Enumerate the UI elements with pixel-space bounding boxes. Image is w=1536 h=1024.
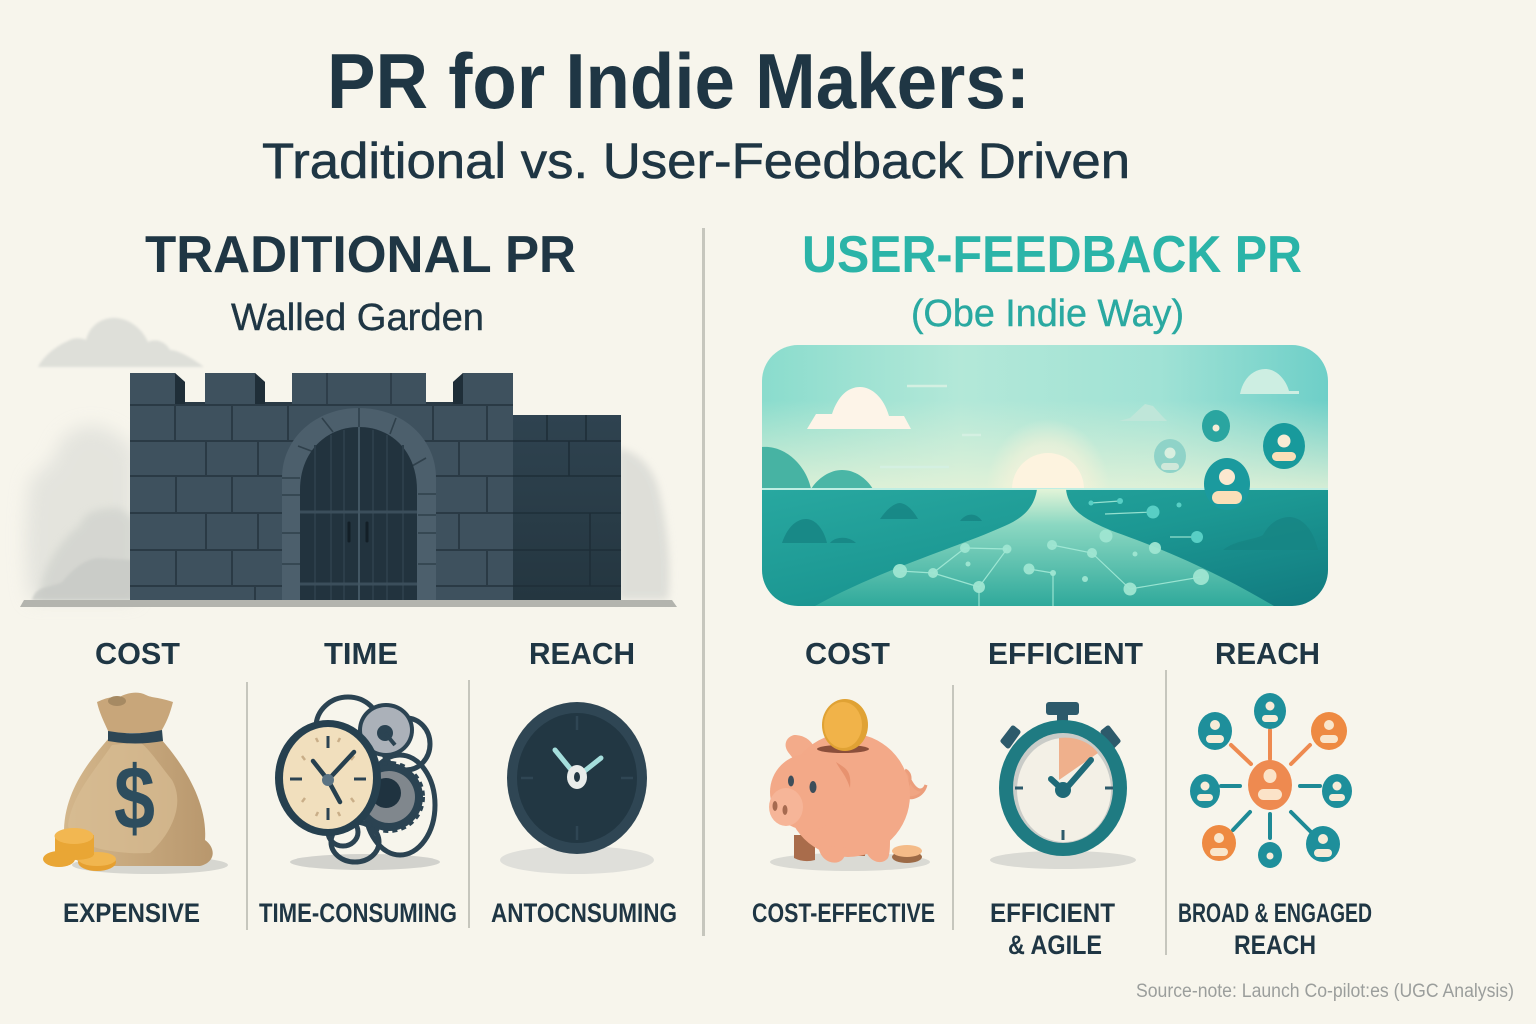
label: cost: COST (805, 636, 890, 671)
central user (1248, 760, 1292, 810)
value: efficient and agile: EFFICIENT (990, 898, 1115, 928)
value: broad and engaged reach (1178, 898, 1372, 960)
ground line (20, 600, 677, 607)
label: reach: REACH (1215, 636, 1320, 671)
glowing road (815, 489, 1274, 606)
metric: time (259, 636, 457, 928)
title: PR for Indie Makers: (327, 37, 1030, 125)
illustration: castle wall with gate (20, 318, 677, 607)
label: cost: COST (95, 636, 180, 671)
subheading: walled garden: Walled Garden (231, 297, 484, 339)
label: time: TIME (324, 636, 398, 671)
gold coins (43, 828, 116, 871)
main wall with bricks (130, 403, 513, 600)
sky (762, 345, 1328, 490)
subheading: obe indie way: (Obe Indie Way) (911, 293, 1184, 335)
grey gear (358, 703, 414, 757)
metric: cost (752, 636, 935, 928)
value: cost-effective: COST-EFFECTIVE (752, 898, 935, 928)
stone archway (282, 408, 436, 600)
sun with glow (998, 425, 1099, 488)
value: expensive: EXPENSIVE (63, 898, 200, 928)
wooden door (300, 427, 417, 600)
distant mounds (782, 503, 1318, 550)
sea (762, 489, 1328, 606)
connectors (1221, 730, 1320, 838)
small coin (892, 845, 922, 863)
clouds behind the wall (26, 318, 670, 600)
label: reach: REACH (529, 636, 635, 671)
metric: cost (43, 636, 228, 928)
metric: reach (1178, 636, 1372, 960)
metric: reach (491, 636, 677, 928)
metric divider (468, 680, 470, 928)
icon: dark clock (500, 702, 654, 874)
panel: user-feedback PR (752, 226, 1372, 960)
gold coin (822, 699, 868, 751)
icon: piggy bank (769, 699, 930, 871)
icon: clock with gears (275, 697, 440, 870)
right wall tower (513, 415, 621, 600)
clock face (275, 720, 381, 836)
metric divider (952, 685, 954, 930)
label: efficient: EFFICIENT (988, 636, 1143, 671)
metric: efficient (988, 636, 1143, 960)
icon: user network (1190, 693, 1352, 868)
source note: Source-note: Launch Co-pilot:es (UGC Analysis) (1136, 981, 1514, 1002)
metric divider (246, 682, 248, 930)
clouds (807, 369, 1299, 467)
subtitle: Traditional vs. User-Feedback Driven (262, 133, 1130, 189)
icon: money bag (43, 693, 228, 874)
value: efficient and agile (990, 898, 1115, 960)
dollar sign: $ (114, 749, 155, 849)
tangled loops (316, 697, 435, 862)
value: time-consuming: TIME-CONSUMING (259, 898, 457, 928)
metric divider (1165, 670, 1167, 955)
central divider (702, 228, 705, 936)
hills (762, 447, 873, 489)
illustration: open road landscape (762, 345, 1328, 606)
heading: user-feedback PR: USER-FEEDBACK PR (802, 226, 1302, 284)
dark gear (355, 763, 423, 831)
value: broad and engaged reach: BROAD & ENGAGED (1178, 898, 1372, 928)
floating user bubbles (1154, 410, 1305, 510)
heading: traditional PR: TRADITIONAL PR (145, 226, 576, 284)
icon: stopwatch (990, 702, 1136, 869)
value: efficient and agile: & AGILE (1008, 930, 1102, 960)
value: broad and engaged reach: REACH (1234, 930, 1316, 960)
battlements (130, 373, 513, 405)
network nodes on road (893, 498, 1209, 606)
outer users (1190, 693, 1352, 868)
value: antocnsuming: ANTOCNSUMING (491, 898, 677, 928)
panel: traditional PR (20, 226, 677, 930)
